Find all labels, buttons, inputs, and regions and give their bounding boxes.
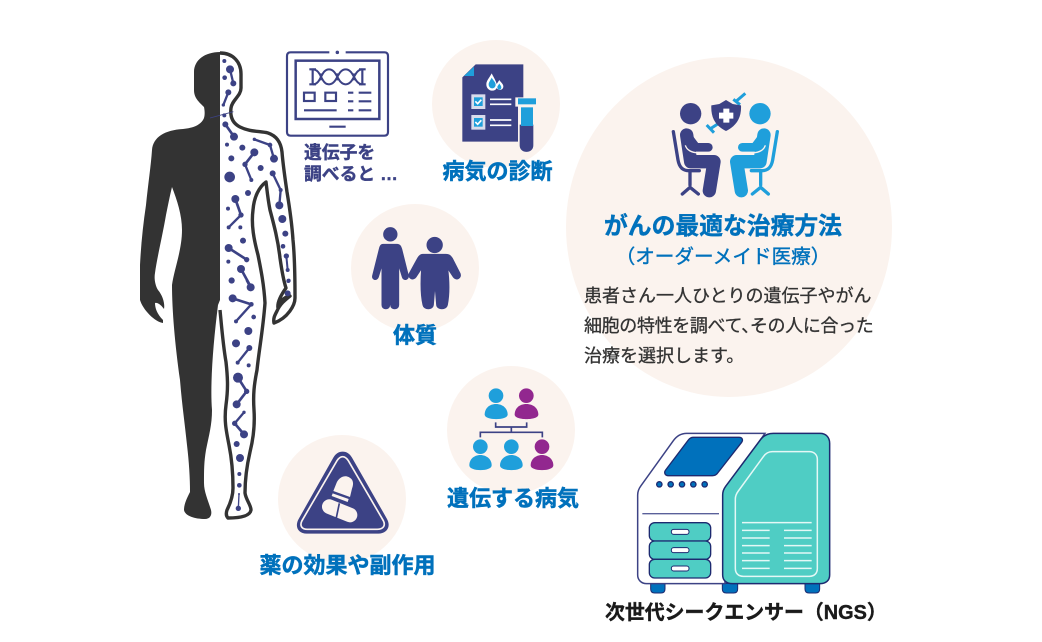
body text — [584, 286, 873, 366]
background circle — [432, 40, 560, 168]
body text: 細胞の特性を調べて、その人に合った — [584, 316, 873, 336]
text: 遺伝子を調べると: 遺伝子を — [304, 142, 375, 162]
subheading: （オーダーメイド医療） — [616, 246, 830, 268]
panel: diagnosis — [432, 40, 560, 184]
heading: がんの最適な治療方法 — [604, 212, 842, 240]
body text: 治療を選択します。 — [584, 346, 744, 366]
cell dots lower body — [229, 278, 291, 511]
body text: 患者さん一人ひとりの遺伝子やがん — [584, 286, 871, 306]
panel: drugs — [259, 435, 436, 578]
label: 次世代シークエンサー（NGS） — [605, 601, 887, 624]
right person — [737, 103, 777, 194]
icon: doctor and patient — [673, 93, 777, 194]
panel: constitution — [351, 204, 479, 348]
left person — [673, 103, 714, 194]
label: 病気の診断 — [442, 159, 553, 184]
icon: document and test tube — [462, 64, 537, 152]
cell dots upper body — [210, 59, 291, 291]
background circle — [447, 366, 575, 494]
panel: body figure — [140, 52, 295, 519]
icon: warning triangle with pills — [297, 452, 389, 534]
label: 体質 — [393, 323, 437, 348]
panel: NGS machine — [605, 433, 887, 624]
icon: family tree — [469, 388, 553, 470]
background circle — [566, 57, 892, 397]
text: 遺伝子を調べると: 調べると … — [304, 164, 398, 184]
outline right half — [220, 53, 295, 518]
panel: hereditary — [447, 366, 579, 511]
label: 薬の効果や副作用 — [259, 553, 436, 578]
text: 遺伝子を調べると — [304, 142, 398, 184]
silhouette left half — [140, 52, 220, 519]
panel: optimal cancer treatment — [566, 57, 892, 397]
icon: shield with syringe — [707, 93, 745, 133]
icon: two people — [373, 228, 460, 309]
background circle — [278, 435, 406, 563]
icon: sequencer — [638, 433, 830, 593]
label: 遺伝する病気 — [447, 486, 579, 511]
icon: DNA monitor — [287, 52, 388, 136]
background circle — [351, 204, 479, 332]
